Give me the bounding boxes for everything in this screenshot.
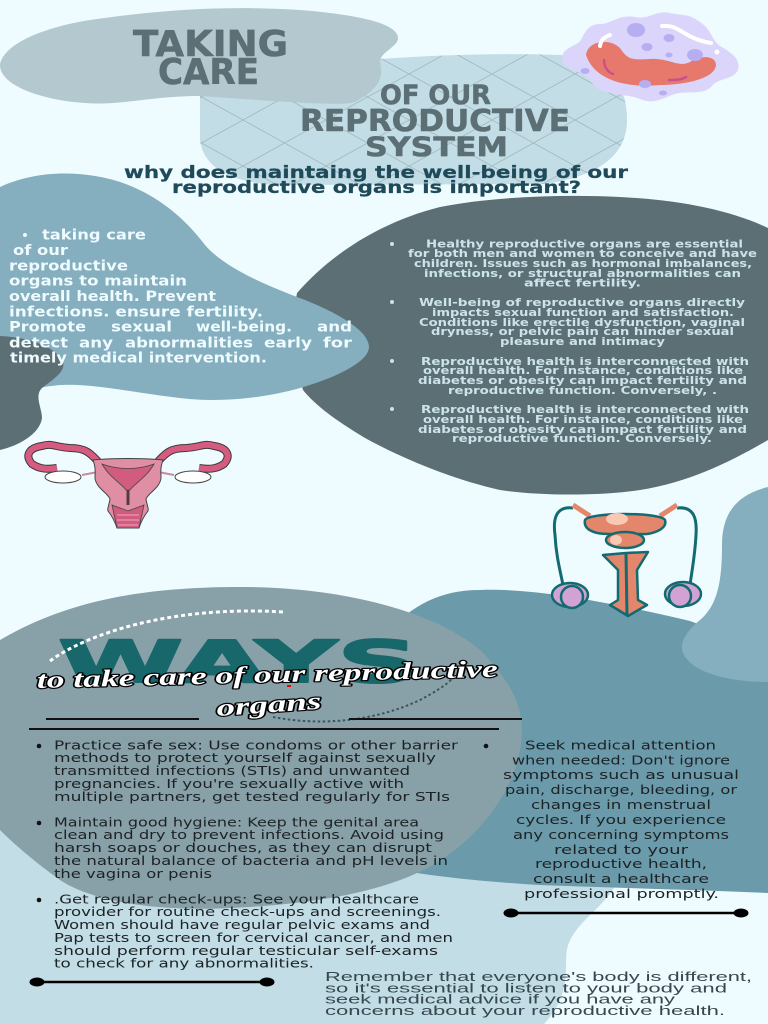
text block: taking care of reproductive organs — [9, 228, 352, 366]
panel: small dark blob at left edge — [0, 336, 63, 450]
text block: taking care of reproductive organs: detect — [9, 336, 68, 352]
text block: taking care of reproductive organs: infections. ensure fertility. — [9, 304, 263, 320]
heading: why question: reproductive organs is important? — [172, 178, 581, 198]
heading: taking care: TAKING — [133, 24, 288, 65]
bullet: overall health two: diabetes or obesity can impact fertility and — [418, 423, 747, 436]
bullet: sexual function: pleasure and intimacy — [500, 335, 665, 348]
bullet: healthy organs: affect fertility. — [524, 276, 641, 290]
heading: taking care — [133, 24, 288, 93]
bullet: overall health one: reproductive function. Conversely, . — [448, 384, 717, 397]
text block: taking care of reproductive organs: organs to maintain — [9, 274, 187, 290]
text block: taking care of reproductive organs: early — [264, 336, 312, 352]
text block: taking care of reproductive organs: taking care — [42, 228, 146, 244]
bullet: healthy organs: infections, or structural abnormalities can — [424, 267, 741, 280]
bullet: sexual function: Well-being of reproductive organs directly — [419, 296, 745, 309]
text block: taking care of reproductive organs: reproductive — [9, 258, 128, 274]
tip: safe sex — [37, 738, 458, 804]
icon: male reproductive organs — [552, 505, 701, 616]
text block: taking care of reproductive organs: sexual — [111, 320, 172, 336]
tip: safe sex: transmitted infections (STIs) and unwanted — [54, 764, 410, 778]
panel: lower light blue wave — [0, 815, 620, 1024]
panel: right dark blob — [295, 196, 768, 495]
bullet: overall health one — [390, 355, 749, 397]
heading: of our reproductive system: REPRODUCTIVE — [300, 104, 570, 139]
subheading: to take care of our reproductive organs — [37, 657, 499, 722]
text block: taking care of reproductive organs: abnormalities — [125, 336, 253, 352]
bullet: overall health two: overall health. For instance, conditions like — [423, 413, 743, 426]
text block: taking care of reproductive organs: any — [79, 336, 113, 352]
text block: seek medical attention: when needed: Don't ignore — [512, 754, 730, 768]
tip: check-ups: .Get regular check-ups: See your healthcare — [54, 892, 419, 906]
decorative dotted arc: white — [50, 611, 283, 661]
text block: seek medical attention: any concerning symptoms — [513, 828, 729, 842]
tip: safe sex: Practice safe sex: Use condoms or other barrier — [54, 738, 458, 752]
heading: why question — [124, 163, 629, 198]
closing note: Remember that everyone's body is different, — [325, 969, 752, 984]
tip: hygiene — [37, 816, 448, 881]
text block: seek medical attention — [484, 738, 739, 901]
bullet: healthy organs — [390, 238, 757, 290]
bullet: healthy organs: children. Issues such as hormonal imbalances, — [414, 257, 752, 270]
tip: check-ups: should perform regular testicular self-exams — [54, 944, 438, 958]
text block: taking care of reproductive organs: of our — [13, 243, 68, 259]
icon: female reproductive organs — [28, 445, 228, 528]
decorative dotted arc: dark — [273, 678, 453, 721]
bullet: overall health one: Reproductive health is interconnected with — [421, 355, 749, 368]
tip: hygiene: clean and dry to prevent infections. Avoid using — [54, 828, 444, 842]
panel: title blob — [0, 8, 398, 104]
heading: of our reproductive system: SYSTEM — [365, 132, 508, 163]
tip: check-ups: Pap tests to screen for cervical cancer, and men — [54, 931, 453, 945]
text block: seek medical attention: reproductive health, — [535, 857, 707, 871]
text block: seek medical attention: professional promptly. — [524, 887, 719, 901]
tip: safe sex: methods to protect yourself against sexually — [54, 751, 436, 765]
tip: safe sex: pregnancies. If you're sexually active with — [54, 777, 404, 791]
text block: seek medical attention: changes in menstrual — [531, 798, 711, 812]
bullet: overall health two — [390, 403, 749, 445]
bullet: overall health one: overall health. For instance, conditions like — [423, 364, 743, 377]
text block: importance bullets — [390, 238, 757, 445]
tip: check-ups: provider for routine check-ups and screenings. — [54, 905, 441, 919]
bullet: overall health one: diabetes or obesity can impact fertility and — [418, 374, 747, 387]
heading: why question: why does maintaing the well-being of our — [124, 163, 629, 183]
tip: hygiene: harsh soaps or douches, as they can disrupt — [54, 841, 432, 855]
closing note — [325, 969, 752, 1018]
heading: of our reproductive system: OF OUR — [380, 80, 491, 111]
icon: cell — [562, 12, 739, 101]
panel: grey ways circle — [0, 587, 522, 909]
text block: seek medical attention: related to your — [554, 843, 688, 857]
subheading: to take care of our reproductive organs: to take care of our reproductive — [37, 657, 499, 694]
bullet: sexual function: impacts sexual function and satisfaction. — [432, 306, 734, 319]
title text — [133, 24, 570, 163]
bullet: healthy organs: Healthy reproductive organs are essential — [426, 238, 743, 250]
divider rules — [29, 719, 522, 729]
tip: hygiene: Maintain good hygiene: Keep the genital area — [54, 816, 419, 830]
divider: right dumbbell rule — [504, 908, 748, 918]
panel: right edge blob — [682, 487, 768, 682]
text block: taking care of reproductive organs: and — [317, 320, 352, 336]
tip: check-ups: Women should have regular pelvic exams and — [54, 918, 430, 932]
panel: lower teal blob — [300, 590, 768, 893]
closing note: seek medical advice if you have any — [325, 992, 676, 1006]
text block: seek medical attention: cycles. If you experience — [516, 813, 726, 827]
bullet: overall health two: Reproductive health is interconnected with — [421, 403, 749, 416]
text block: seek medical attention: Seek medical attention — [525, 738, 716, 752]
text block: seek medical attention: pain, discharge, bleeding, or — [505, 783, 737, 797]
bullet: healthy organs: for both men and women to conceive and have — [408, 247, 757, 260]
text block: taking care of reproductive organs: for — [323, 336, 352, 352]
heading: ways: WAYS — [58, 628, 419, 696]
closing note: concerns about your reproductive health. — [325, 1003, 725, 1018]
decorative red mark — [287, 685, 291, 687]
tip: hygiene: the vagina or penis — [54, 867, 212, 881]
tip: check-ups: to check for any abnormalities. — [54, 956, 314, 970]
text block: taking care of reproductive organs: overall health. Prevent — [9, 289, 216, 305]
closing note: so it's essential to listen to your body and — [325, 980, 727, 996]
text block: taking care of reproductive organs: well-being. — [196, 320, 292, 336]
bullet: overall health two: reproductive function. Conversely. — [452, 432, 712, 445]
subheading: to take care of our reproductive organs: organs — [216, 689, 322, 722]
text block: seek medical attention: symptoms such as unusual — [503, 768, 739, 782]
text block: taking care of reproductive organs: Promote — [9, 320, 86, 336]
heading: of our reproductive system — [300, 80, 570, 163]
panel: title backing box with lattice — [200, 54, 627, 185]
tip: safe sex: multiple partners, get tested regularly for STIs — [54, 790, 450, 804]
panel: left blue blob — [0, 173, 369, 400]
text block: taking care of reproductive organs: timely medical intervention. — [10, 350, 267, 366]
bullet: sexual function — [390, 296, 745, 348]
bullet: sexual function: Conditions like erectile dysfunction, vaginal — [419, 316, 745, 329]
bullet: sexual function: dryness, or pelvic pain can hinder sexual — [431, 325, 734, 338]
heading: taking care: CARE — [158, 52, 259, 93]
text block: tips list — [37, 738, 458, 970]
divider: left dumbbell rule — [30, 978, 274, 986]
tip: check-ups — [37, 892, 453, 970]
text block: seek medical attention: consult a healthcare — [533, 872, 709, 886]
tip: hygiene: the natural balance of bacteria and pH levels in — [54, 854, 448, 868]
